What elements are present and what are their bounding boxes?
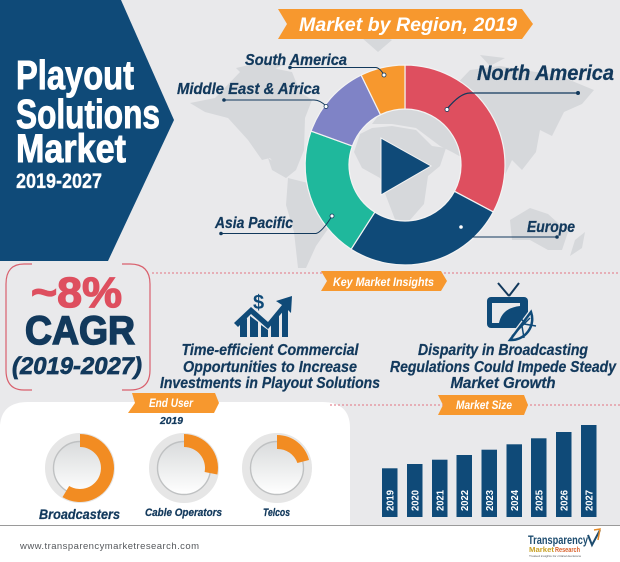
logo: Transparency Market Research: Research — [555, 545, 580, 554]
ribbon: end user: End User — [149, 398, 193, 410]
label: Asia Pacific — [214, 214, 334, 235]
bar chart: market size: 2026 — [558, 490, 570, 511]
insight: time-efficient text: Opportunities to Increase — [183, 359, 357, 376]
title hexagon panel — [0, 0, 174, 261]
logo: Transparency Market Research: Market — [529, 545, 555, 554]
label: South America — [245, 52, 386, 77]
label: telcos: Telcos — [263, 507, 290, 519]
donut: cable operators — [153, 434, 218, 499]
label: Asia Pacific: Asia Pacific — [214, 215, 293, 232]
bar chart: market size — [382, 425, 596, 517]
label: cable operators: Cable Operators — [145, 507, 222, 519]
label: Europe: Europe — [527, 219, 575, 236]
ribbon: market by region: Market by Region, 2019 — [299, 15, 517, 36]
icon: TV with satellite dish — [487, 283, 536, 340]
world map background — [190, 34, 594, 268]
bar chart: market size: 2019 — [384, 490, 396, 511]
label: South America: South America — [245, 52, 347, 69]
ribbon: key market insights: Key Market Insights — [333, 277, 434, 289]
logo: Transparency Market Research: Transparency — [528, 535, 588, 547]
logo: Transparency Market Research: Trusted insights for critical decisions — [529, 554, 582, 558]
bar chart: market size: 2024 — [509, 490, 521, 511]
insight: time-efficient text: Time-efficient Commercial — [182, 342, 359, 359]
title: 2019-2027 — [16, 170, 102, 193]
insight: disparity text: Market Growth — [450, 375, 556, 392]
CAGR callout: (2019-2027) — [12, 353, 142, 380]
footer — [0, 525, 620, 562]
bar chart: market size: 2021 — [434, 490, 446, 511]
icon: play triangle — [381, 138, 431, 195]
ribbon: market size: Market Size — [456, 400, 513, 412]
insight: time-efficient text — [160, 342, 380, 392]
label: North America: North America — [477, 62, 614, 85]
ribbon: key market insights — [321, 271, 447, 291]
insight: disparity text — [390, 342, 617, 392]
CAGR callout: CAGR — [25, 309, 135, 353]
icon: rising chart with dollar: $ — [253, 292, 264, 314]
insight: time-efficient text: Investments in Playout Solutions — [160, 375, 380, 392]
label: North America — [445, 62, 614, 112]
icon: rising chart with dollar — [234, 292, 292, 337]
bar chart: market size: 2025 — [534, 490, 546, 511]
donut: broadcasters — [49, 434, 114, 502]
bar chart: market size: 2023 — [484, 490, 496, 511]
label: broadcasters: Broadcasters — [39, 506, 120, 522]
ribbon: market by region — [278, 9, 533, 39]
panel: end user — [0, 393, 350, 525]
year label 2019: 2019 — [159, 415, 183, 427]
label: Middle East & Africa — [177, 81, 328, 108]
ribbon: market size — [438, 395, 528, 415]
insight: disparity text: Disparity in Broadcasting — [418, 342, 588, 359]
title — [16, 52, 160, 193]
label: Europe — [459, 219, 575, 239]
bar chart: market size: 2022 — [459, 490, 471, 511]
title: Playout — [16, 52, 134, 98]
CAGR callout: ~8% — [31, 269, 122, 317]
CAGR callout — [6, 264, 150, 390]
ribbon: end user — [128, 393, 219, 413]
title: Market — [16, 127, 126, 171]
bar chart: market size: 2020 — [410, 490, 422, 511]
donut chart: market by region — [305, 65, 505, 265]
bar chart: market size: 2027 — [584, 490, 596, 511]
logo: Transparency Market Research — [528, 529, 600, 558]
donut: telcos — [246, 435, 309, 499]
label: Middle East & Africa: Middle East & Africa — [177, 81, 320, 98]
website url: www.transparencymarketresearch.com — [19, 541, 199, 552]
title: Solutions — [16, 91, 160, 137]
